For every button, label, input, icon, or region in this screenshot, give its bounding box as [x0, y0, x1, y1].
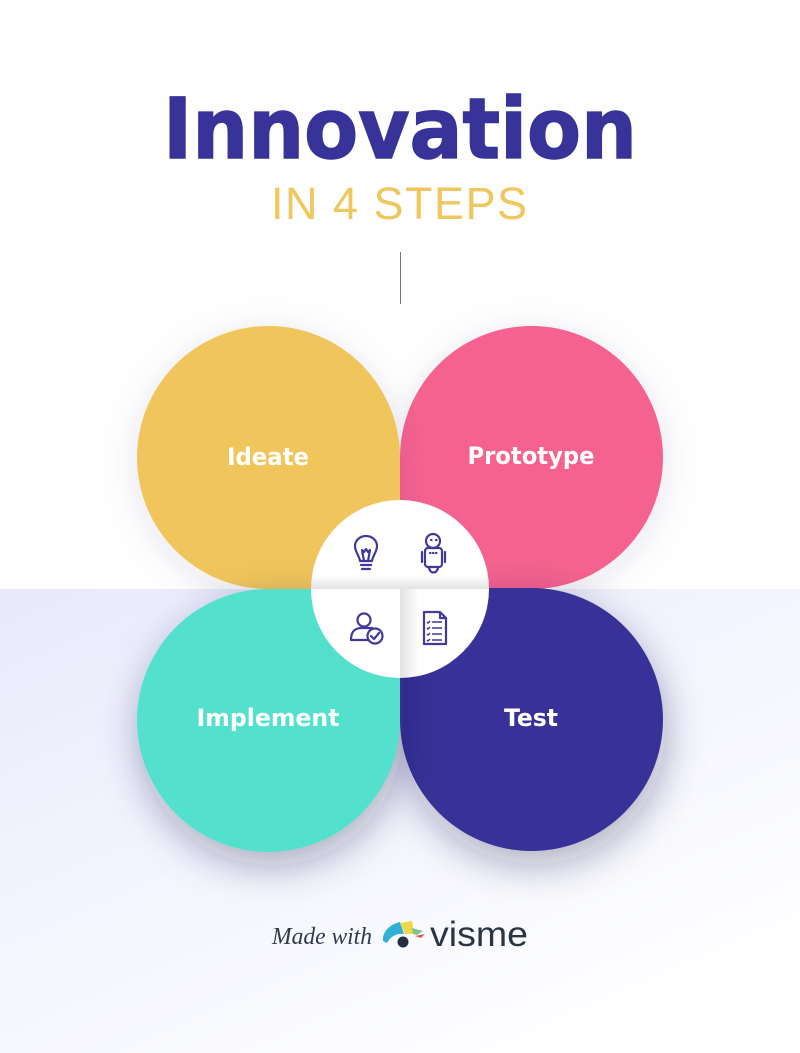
label: Implement: Implement	[196, 704, 340, 732]
label: Prototype: Prototype	[468, 442, 594, 470]
visme logo	[383, 921, 425, 948]
label: Ideate: Ideate	[227, 443, 309, 471]
icon: robot	[422, 534, 445, 572]
label: Test: Test	[504, 704, 558, 732]
title: Innovation	[163, 80, 637, 178]
petal: Test	[400, 588, 663, 851]
footer: made with visme	[271, 915, 528, 954]
divider line	[400, 252, 401, 304]
icon: user with check	[351, 614, 382, 644]
center circle	[311, 500, 489, 678]
subtitle: IN 4 STEPS	[271, 178, 527, 229]
made with text: Made with	[271, 924, 372, 950]
petal: Prototype	[400, 326, 663, 589]
visme wordmark: visme	[430, 915, 528, 954]
petal: Ideate	[137, 326, 400, 589]
icon: checklist document	[424, 612, 446, 644]
petal: Implement	[137, 589, 400, 852]
icon: light bulb	[355, 536, 377, 569]
